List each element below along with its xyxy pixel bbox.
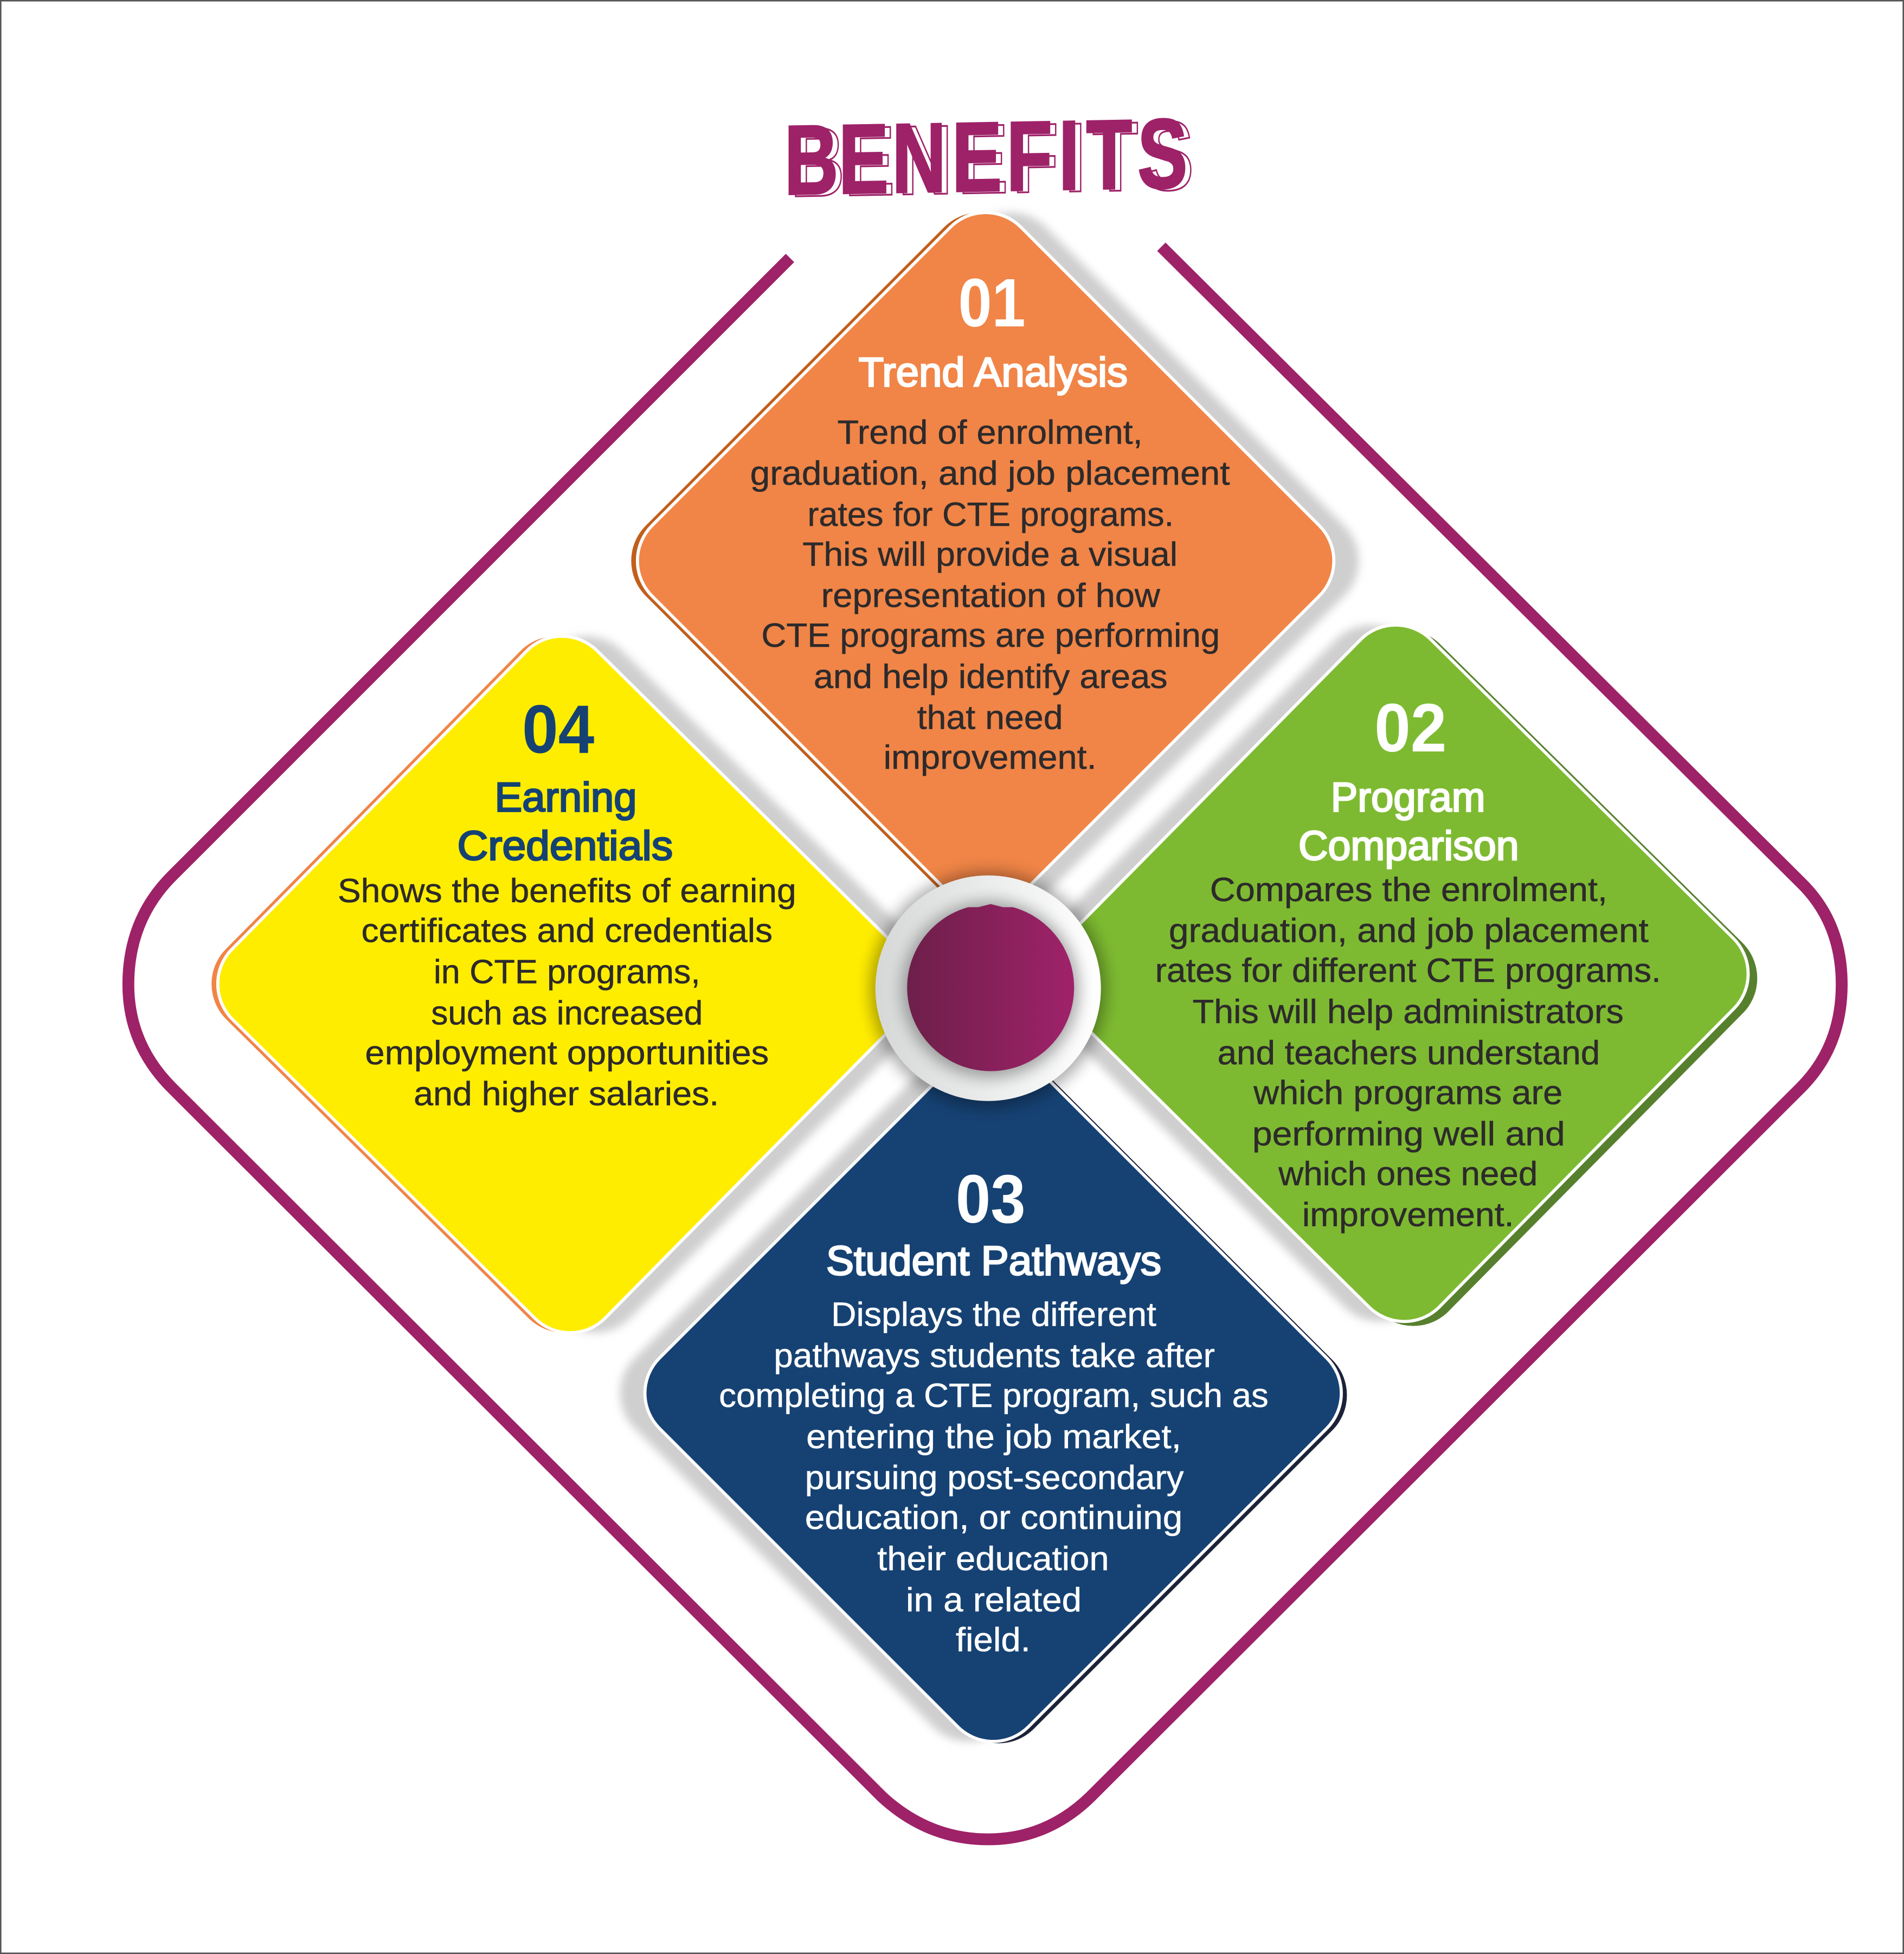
body text: student pathways: entering the job market, (806, 1418, 1181, 1456)
body text: program comparison: which ones need (1278, 1155, 1538, 1193)
body text: trend analysis: This will provide a visual (802, 536, 1178, 574)
heading: program comparison: Comparison (1298, 823, 1519, 869)
body text: trend analysis: CTE programs are performing (761, 617, 1220, 654)
body text: earning credentials: in CTE programs, (434, 953, 700, 991)
body text: program comparison: performing well and (1252, 1115, 1565, 1153)
heading: earning credentials (458, 774, 673, 869)
body text: program comparison: which programs are (1253, 1074, 1562, 1111)
body text: earning credentials: and higher salaries. (414, 1076, 719, 1113)
body text: student pathways: their education (877, 1540, 1109, 1578)
panel: 02 program comparison (1006, 605, 1778, 1347)
body text: earning credentials: such as increased (431, 994, 703, 1032)
body text: earning credentials: certificates and credentials (362, 912, 773, 950)
body text: program comparison: rates for different CTE programs. (1155, 952, 1661, 989)
body text: student pathways: completing a CTE program, such as (719, 1377, 1269, 1415)
body text: program comparison: Compares the enrolment, (1210, 871, 1607, 909)
panel: 03 student pathways (600, 1024, 1368, 1764)
center circle (870, 871, 1107, 1108)
body text: student pathways: in a related (906, 1582, 1082, 1619)
body text: student pathways: pathways students take after (774, 1337, 1215, 1374)
heading: earning credentials: Credentials (458, 823, 673, 869)
title: BENEFITS (784, 99, 1187, 216)
heading: trend analysis: Trend Analysis (859, 350, 1128, 396)
body text: student pathways: Displays the different (831, 1296, 1156, 1334)
body text: program comparison: and teachers understand (1218, 1034, 1600, 1072)
body text: student pathways: pursuing post-secondary (805, 1460, 1184, 1497)
number 02: 02 (1374, 690, 1446, 766)
body text: trend analysis: that need (917, 699, 1063, 737)
body text: trend analysis: improvement. (884, 739, 1097, 776)
heading: student pathways: Student Pathways (826, 1238, 1161, 1284)
number 04: 04 (522, 691, 594, 767)
body text: trend analysis: representation of how (821, 577, 1160, 614)
panel: 04 earning credentials (191, 615, 960, 1353)
body text: program comparison: This will help administrators (1193, 993, 1624, 1031)
body text: program comparison: improvement. (1302, 1197, 1514, 1234)
heading: program comparison: Program (1331, 774, 1485, 820)
body text: student pathways: education, or continuing (805, 1499, 1182, 1537)
body text: trend analysis (750, 414, 1230, 776)
number 01: 01 (958, 265, 1026, 341)
body text: earning credentials: employment opportunities (365, 1034, 769, 1072)
body text: trend analysis: Trend of enrolment, (838, 414, 1143, 451)
body text: earning credentials: Shows the benefits of earning (338, 872, 796, 910)
body text: program comparison: graduation, and job placement (1169, 912, 1649, 950)
body text: trend analysis: and help identify areas (814, 658, 1168, 696)
heading: earning credentials: Earning (494, 774, 636, 820)
body text: earning credentials (338, 872, 796, 1113)
outer frame (128, 247, 1842, 1840)
body text: student pathways (719, 1296, 1269, 1659)
title: BENEFITS (790, 101, 1194, 218)
panel: 01 trend analysis (610, 192, 1379, 930)
heading: program comparison (1298, 774, 1519, 869)
body text: program comparison (1155, 871, 1661, 1234)
body text: student pathways: field. (956, 1621, 1031, 1659)
number 03: 03 (956, 1161, 1026, 1237)
body text: trend analysis: rates for CTE programs. (807, 496, 1174, 534)
body text: trend analysis: graduation, and job placement (750, 455, 1230, 492)
